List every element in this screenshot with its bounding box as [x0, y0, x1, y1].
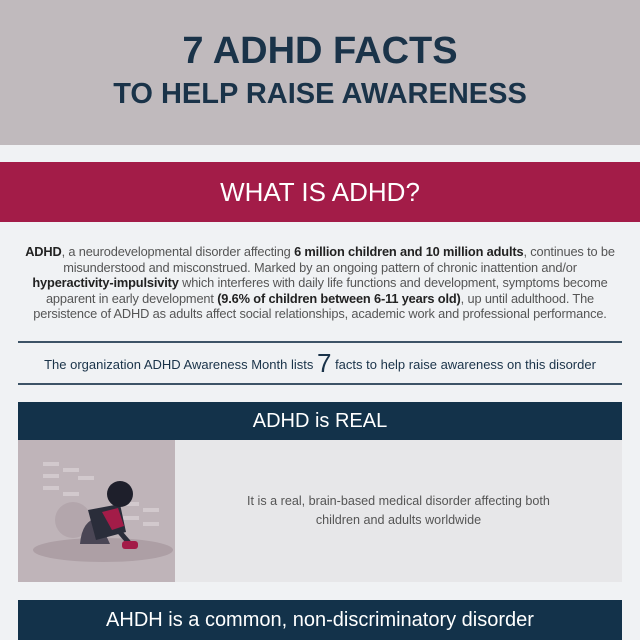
- intro text block: apparent in early development (9.6% of children between 6-11 years old), up until adulthood. The: [46, 290, 594, 306]
- text: children and adults worldwide: [316, 513, 481, 527]
- heading: ADHD is REAL: [253, 410, 387, 432]
- callout: 7 facts: The organization ADHD Awareness Month lists 7 facts to help raise awareness on this disorder: [44, 348, 596, 378]
- section banner: what is ADHD: [0, 162, 640, 222]
- title: TO HELP RAISE AWARENESS: [113, 78, 527, 110]
- text: [247, 494, 550, 527]
- header panel: [0, 0, 640, 145]
- intro text block: misunderstood and misconstrued. Marked by an ongoing pattern of chronic inattention and/or: [63, 260, 577, 274]
- text: It is a real, brain-based medical disorder affecting both: [247, 494, 550, 508]
- panel heading: common disorder: AHDH is a common, non-discriminatory disorder: [106, 609, 534, 631]
- panel heading: common disorder: [18, 600, 622, 640]
- section banner: what is ADHD: WHAT IS ADHD?: [220, 177, 420, 207]
- illustration: child playing: [18, 440, 175, 582]
- intro text block: ADHD, a neurodevelopmental disorder affecting 6 million children and 10 million adults, continues to be: [25, 244, 615, 259]
- heading: [18, 402, 622, 440]
- intro text block: persistence of ADHD as adults affect social relationships, academic work and professional performance.: [33, 306, 607, 321]
- title: [113, 30, 527, 110]
- intro text block: hyperactivity-impulsivity which interferes with daily life functions and development, symptoms become: [32, 275, 608, 290]
- panel: ADHD is real: [18, 402, 622, 582]
- intro text block: [25, 244, 615, 321]
- title: 7 ADHD FACTS: [182, 30, 458, 72]
- callout: 7 facts: [18, 341, 622, 385]
